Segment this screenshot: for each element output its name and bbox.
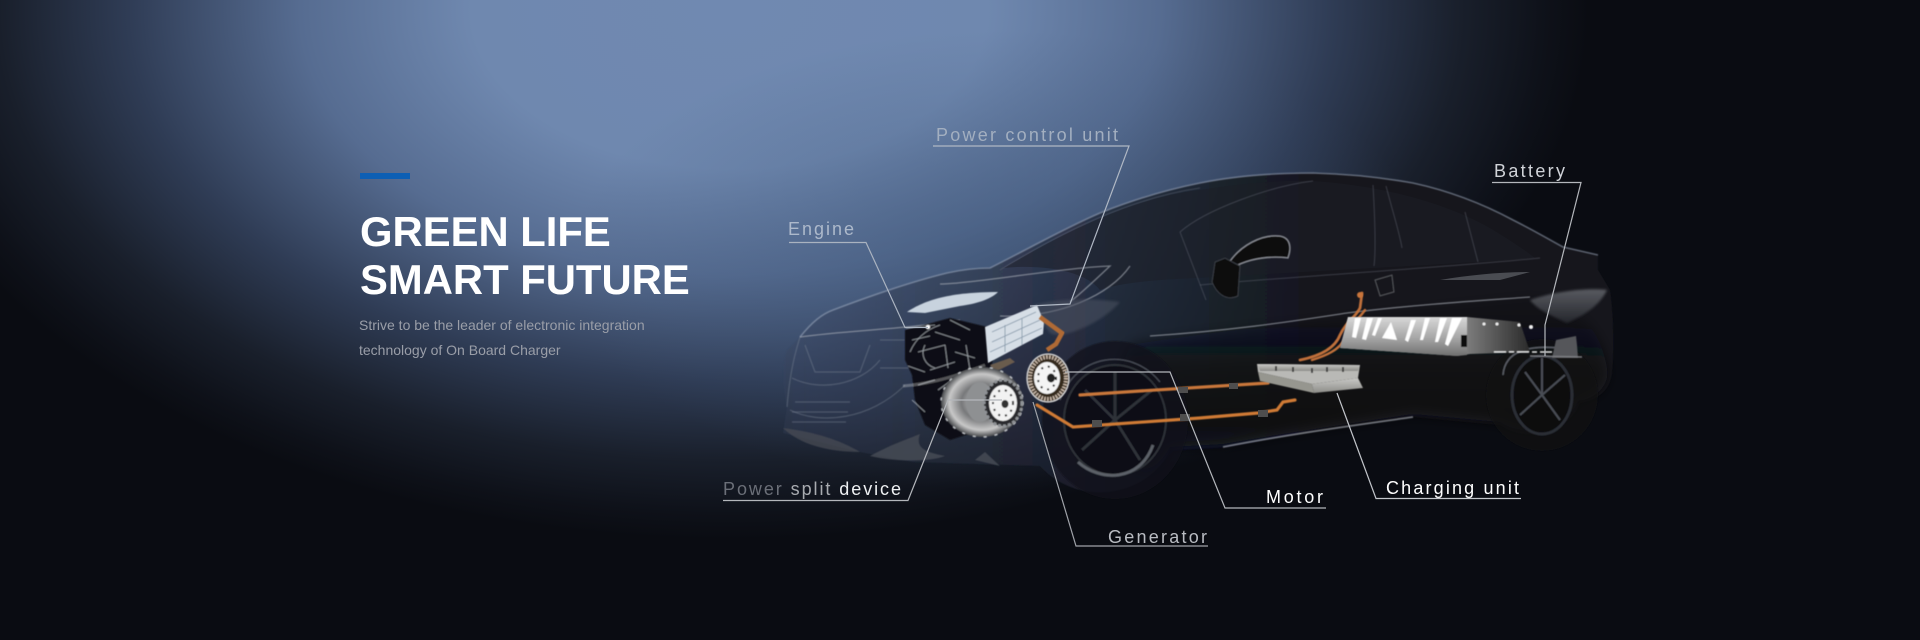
callout: generator: Generator <box>1108 527 1207 547</box>
callout: engine <box>788 219 928 328</box>
power split housing <box>941 367 1023 437</box>
front bumper and grille <box>787 337 930 422</box>
motor gear <box>1027 354 1069 402</box>
front fender sweep <box>1030 299 1120 335</box>
small connector <box>1357 275 1394 298</box>
callout: power split device: Power split device <box>723 479 901 499</box>
generator gear <box>984 380 1022 426</box>
callout: generator <box>1033 402 1208 547</box>
callout: power split device <box>723 400 1002 500</box>
lower front splitter <box>783 428 1000 466</box>
orange high voltage cables <box>1037 293 1365 427</box>
cable clips <box>1092 383 1268 427</box>
callout: engine: Engine <box>788 219 854 239</box>
engine top cover <box>907 292 998 313</box>
car body <box>783 173 1613 492</box>
car illustration <box>783 173 1613 499</box>
orange connector <box>1040 317 1062 350</box>
engine block <box>903 318 1000 440</box>
rear wheel <box>1486 339 1598 451</box>
subtitle: technology of On Board Charger <box>359 342 561 358</box>
character lines <box>800 266 1530 447</box>
callout: battery: Battery <box>1494 161 1565 181</box>
callout: motor: Motor <box>1266 487 1323 507</box>
rear suspension <box>1530 336 1582 358</box>
windows <box>1004 181 1535 290</box>
subtitle: Strive to be the leader of electronic integration <box>359 317 645 333</box>
callout: charging unit <box>1337 393 1521 498</box>
front wheel <box>1042 341 1188 499</box>
window frames <box>1000 181 1540 300</box>
high voltage battery <box>1340 317 1560 356</box>
callout: motor <box>1065 372 1326 508</box>
door handle <box>1440 272 1530 280</box>
title: SMART FUTURE <box>360 256 690 303</box>
callout: power control unit <box>933 125 1129 306</box>
rear quarter panel <box>1530 289 1607 323</box>
callout: power control unit: Power control unit <box>936 125 1118 145</box>
door mirror <box>1212 236 1290 298</box>
hood and roof highlight <box>800 173 1598 337</box>
callout: charging unit: Charging unit <box>1386 478 1519 498</box>
lower door shade <box>1110 297 1608 470</box>
callout: battery <box>1492 161 1581 356</box>
title: GREEN LIFE <box>360 208 611 255</box>
accent bar <box>360 173 410 179</box>
power control unit <box>985 305 1044 372</box>
charging unit <box>1257 364 1363 393</box>
